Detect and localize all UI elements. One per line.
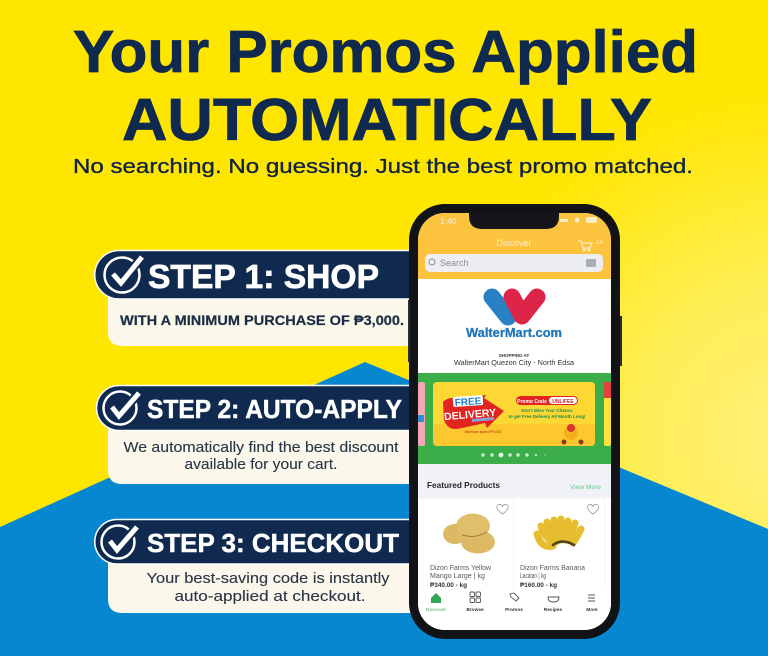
promo banner: DELIVERY <box>444 407 497 423</box>
title: Your Promos Applied <box>73 19 698 85</box>
tab: recipes: Recipes <box>544 607 563 613</box>
tab: more <box>586 595 598 613</box>
featured products heading: Featured Products <box>427 480 500 490</box>
tab: recipes <box>544 597 563 613</box>
promo banner: FREE <box>454 396 482 409</box>
carousel dots <box>481 453 546 457</box>
bottom tab bar <box>418 589 611 630</box>
promo banner: UNLIFEE <box>552 399 574 405</box>
free delivery badge <box>443 395 504 429</box>
tab: promos: Promos <box>505 607 523 613</box>
tab: promos <box>505 593 523 613</box>
app header <box>418 213 611 279</box>
step 3 card <box>108 560 412 613</box>
title: AUTOMATICALLY <box>122 87 652 153</box>
tab: more: More <box>586 607 598 613</box>
status icons <box>560 217 597 223</box>
step 3 check icon <box>102 526 137 558</box>
step 2 text <box>124 440 398 473</box>
title <box>73 19 698 153</box>
step 2 <box>96 386 412 484</box>
tab: discover: Discover <box>426 607 446 613</box>
step 2 text: available for your cart. <box>184 457 338 473</box>
product: mango: ₱340.00 - kg <box>430 582 467 589</box>
step 3 header <box>95 520 412 564</box>
product: mango <box>423 498 514 590</box>
phone screen <box>418 213 611 630</box>
search bar <box>425 254 603 272</box>
promo code tag <box>516 396 578 405</box>
banana image <box>537 519 581 546</box>
WalterMart logo: WalterMart.com <box>466 326 562 340</box>
app header: Discover <box>496 238 532 248</box>
phone body <box>409 204 620 639</box>
phone <box>408 204 622 639</box>
step 2 text: We automatically find the best discount <box>124 440 398 456</box>
product: banana: Dizon Farms Banana <box>520 565 585 572</box>
product: banana: ₱160.00 - kg <box>520 582 557 589</box>
product: mango: Mango Large | kg <box>430 573 485 580</box>
heart icon <box>497 504 508 514</box>
step 1 <box>95 250 412 346</box>
step 3 heading: STEP 3: CHECKOUT <box>147 528 399 558</box>
promo banner: to get Free Delivery All Month Long! <box>508 414 586 419</box>
store label: WalterMart Quezon City - North Edsa <box>454 360 574 367</box>
heart icon <box>587 504 599 514</box>
store label: SHOPPING AT <box>499 353 529 358</box>
step 3 text: Your best-saving code is instantly <box>146 571 390 587</box>
step 1 header <box>95 250 412 299</box>
featured products heading <box>418 464 611 498</box>
tab: browse <box>466 592 484 613</box>
tab: browse: Browse <box>466 607 484 613</box>
product: banana <box>514 498 605 590</box>
subtitle: No searching. No guessing. Just the best promo matched. <box>73 155 693 178</box>
promo banner <box>418 373 611 464</box>
store label <box>454 353 574 367</box>
tab: discover <box>426 593 446 613</box>
app header: 14 <box>596 240 603 246</box>
mango image <box>443 514 495 554</box>
app header: 1:40 <box>440 216 457 226</box>
step 3 <box>95 520 412 613</box>
featured products heading: View More <box>570 484 601 491</box>
step 1 check icon <box>104 257 142 292</box>
step 3 text: auto-applied at checkout. <box>174 589 366 605</box>
notch <box>469 213 559 229</box>
product: mango: Dizon Farms Yellow <box>430 565 492 572</box>
promo banner: Promo Code <box>517 399 547 405</box>
app header: Search <box>440 258 469 268</box>
step 2 card <box>108 428 412 484</box>
WalterMart logo <box>466 297 562 340</box>
step 1 card <box>108 295 412 346</box>
step 2 check icon <box>104 392 139 424</box>
step 2 header <box>96 386 412 430</box>
step 1 text: WITH A MINIMUM PURCHASE OF ₱3,000. <box>120 313 404 328</box>
step 1 heading: STEP 1: SHOP <box>148 258 379 295</box>
step 3 text <box>146 571 390 605</box>
rider mascot <box>562 424 584 444</box>
product: banana: Lacatan | kg <box>520 573 546 580</box>
step 2 heading: STEP 2: AUTO-APPLY <box>147 394 402 424</box>
promo banner: Don't Miss Your Chance <box>521 408 573 413</box>
promo banner: Minimum spend ₱3,000 <box>465 430 501 434</box>
cart icon <box>578 241 592 251</box>
